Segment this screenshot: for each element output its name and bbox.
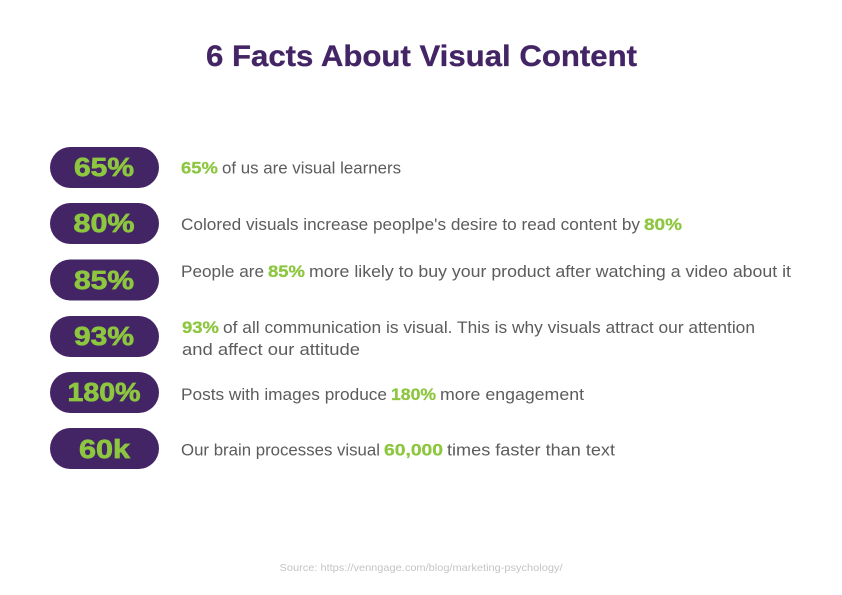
fact row: 180% [50, 372, 584, 413]
text: visual learners: of us are visual learners [222, 160, 401, 178]
text: video: more likely to buy your product after watching a video about it [309, 263, 791, 281]
pill: 65% [50, 147, 159, 188]
title: 6 Facts About Visual Content [206, 40, 637, 73]
text: engagement [181, 386, 584, 404]
fact row: 93% [50, 316, 755, 359]
text: visual learners: 65% [181, 160, 218, 178]
pill: 93% [50, 316, 159, 357]
source note: Source: https://venngage.com/blog/marketing-psychology/ [280, 562, 563, 574]
text: video: 85% [268, 263, 305, 281]
pill: 180%: 180% [68, 379, 140, 407]
pill: 80%: 80% [74, 210, 134, 238]
fact row: 65% [50, 147, 401, 188]
text: communication: of all communication is visual. This is why visuals attract our attention [223, 319, 755, 337]
fact row: 60k [50, 428, 615, 469]
text: video: People are [181, 263, 264, 281]
text: brain [181, 442, 615, 460]
fact row: 85% [50, 260, 791, 300]
text: brain: 60,000 [384, 442, 443, 460]
text: engagement: more engagement [440, 386, 584, 404]
text: brain: times faster than text [447, 442, 615, 460]
pill: 85% [50, 260, 159, 300]
text: colored visuals: 80% [644, 216, 682, 234]
text: communication: 93% [182, 319, 219, 337]
text: communication [182, 319, 755, 359]
pill: 180% [50, 372, 159, 413]
text: colored visuals: Colored visuals increase peoplpe's desire to read content by [181, 216, 641, 234]
fact row: 80% [50, 203, 682, 244]
pill: 60k [50, 428, 159, 469]
pill: 93%: 93% [74, 323, 134, 351]
pill: 85%: 85% [74, 267, 134, 295]
text: engagement: 180% [391, 386, 436, 404]
pill: 65%: 65% [74, 154, 134, 182]
text: brain: Our brain processes visual [181, 442, 380, 460]
text: communication: and affect our attitude [182, 341, 360, 359]
text: engagement: Posts with images produce [181, 386, 387, 404]
pill: 80% [50, 203, 159, 244]
pill: 60k: 60k [79, 436, 131, 464]
